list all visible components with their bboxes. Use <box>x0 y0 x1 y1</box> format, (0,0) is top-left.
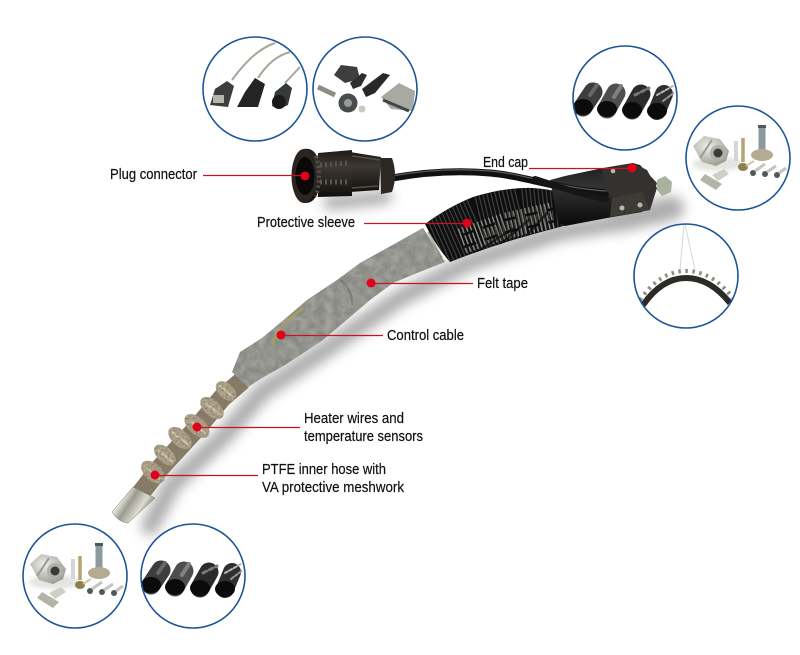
shadow of hose assembly <box>150 197 672 526</box>
detail circle: cable with bead chain <box>634 224 738 328</box>
detail circle: end cap variants (top right) <box>573 46 677 150</box>
felt tape fold <box>340 232 442 305</box>
end cap body <box>550 163 657 226</box>
label: PTFE inner hose with VA protective meshwork: VA protective meshwork <box>262 480 405 496</box>
label: End cap: End cap <box>483 155 528 171</box>
label: Protective sleeve <box>257 215 472 231</box>
end nut <box>657 176 672 196</box>
end cap screws <box>611 169 642 210</box>
label: Control cable <box>276 328 464 344</box>
label: Control cable: Control cable <box>387 328 464 344</box>
end cap housing <box>602 163 672 217</box>
label: End cap <box>483 155 636 172</box>
detail circle: fittings (right) <box>686 106 790 210</box>
label: Felt tape <box>366 276 528 292</box>
label: Heater wires and temperature sensors: Heater wires and <box>304 411 404 427</box>
label: Plug connector <box>110 167 310 183</box>
control cable strand <box>272 308 304 345</box>
label: PTFE inner hose with VA protective meshwork: PTFE inner hose with <box>262 462 386 478</box>
label: Plug connector: Plug connector <box>110 167 197 183</box>
PTFE meshwork and heater wires <box>137 377 243 494</box>
plug connector cable <box>392 170 606 199</box>
label: Felt tape: Felt tape <box>477 276 528 292</box>
label: PTFE inner hose with VA protective meshwork <box>150 462 405 496</box>
detail circle: connector parts <box>313 37 417 141</box>
detail circle: cables with connectors <box>203 37 307 141</box>
label: Protective sleeve: Protective sleeve <box>257 215 355 231</box>
label: Heater wires and temperature sensors <box>192 411 423 445</box>
detail circle: end cap variants (bottom) <box>141 524 245 628</box>
plug connector <box>292 149 395 203</box>
felt tape <box>232 228 445 387</box>
hose assembly <box>112 163 657 523</box>
metal ferrule <box>112 487 155 523</box>
detail circle: fittings (bottom left) <box>23 524 127 628</box>
label: Heater wires and temperature sensors: temperature sensors <box>304 429 423 445</box>
protective sleeve <box>425 188 565 262</box>
